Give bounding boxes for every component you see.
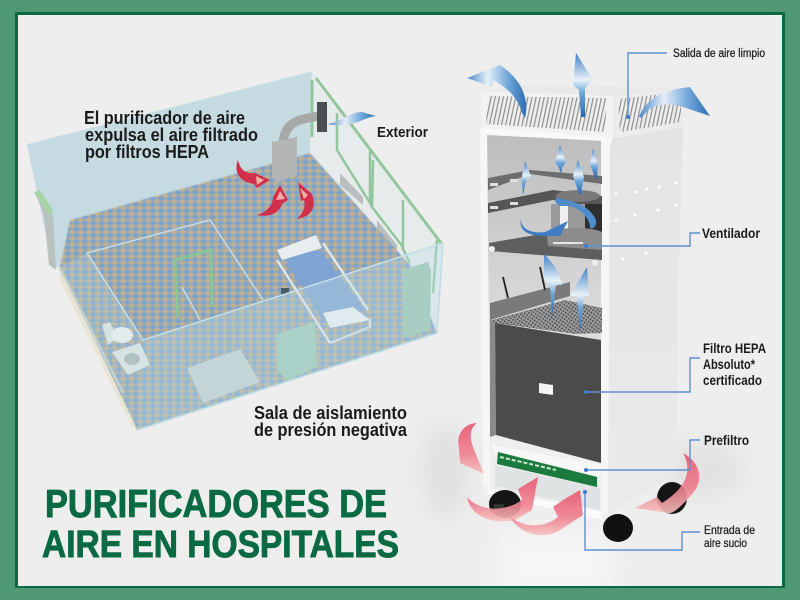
left post	[480, 128, 490, 488]
callout: HEPA filter: Absoluto*	[703, 357, 756, 372]
intake opening	[495, 465, 600, 510]
air purifier cutaway	[458, 53, 710, 542]
right post	[601, 138, 610, 514]
cabinet: centre	[276, 322, 317, 381]
floor shadow	[426, 430, 736, 572]
callout: prefilter: Prefiltro	[704, 432, 749, 448]
inner glass partitions	[87, 220, 263, 320]
bottom frame	[487, 488, 603, 520]
lower rail and handles	[490, 267, 570, 320]
title: AIRE EN HOSPITALES	[42, 524, 399, 566]
checkered floor	[60, 153, 437, 430]
fan	[489, 190, 602, 266]
air purifier unit	[272, 102, 327, 182]
cabinet: right	[402, 262, 431, 338]
callout: HEPA filter	[584, 341, 766, 394]
prefilter band	[492, 445, 600, 487]
upper shelves	[488, 170, 602, 213]
callout: dirty air inlet	[583, 490, 755, 550]
side panel	[607, 127, 683, 514]
room caption: negative pressure: Sala de aislamiento	[254, 403, 407, 423]
callout: clean air outlet: Salida de aire limpio	[673, 48, 765, 60]
callout: dirty air inlet: aire sucio	[704, 536, 747, 550]
exterior blue arrow	[328, 112, 376, 125]
room caption: purifier: El purificador de aire	[84, 108, 245, 128]
HEPA filter	[490, 318, 601, 463]
floor mat	[187, 349, 260, 403]
label: exterior: Exterior	[377, 125, 428, 141]
wheels	[489, 482, 687, 542]
callout: HEPA filter: Filtro HEPA	[703, 341, 766, 356]
door frame	[175, 250, 212, 317]
callout: HEPA filter: certificado	[703, 373, 762, 388]
hospital bed	[277, 235, 370, 343]
callout: dirty air inlet: Entrada de	[704, 523, 755, 537]
side rivets	[614, 182, 678, 260]
room caption: purifier: expulsa el aire filtrado	[85, 125, 258, 145]
room caption: negative pressure	[254, 403, 408, 440]
back wall	[27, 72, 312, 268]
right wall	[310, 72, 443, 333]
red air arrows	[236, 160, 314, 219]
callout: clean air outlet	[626, 48, 765, 119]
room caption: purifier	[84, 108, 258, 162]
title: PURIFICADORES DE	[45, 483, 387, 526]
callout: fan	[584, 225, 760, 248]
isolation room illustration	[27, 72, 443, 430]
top vent cap	[482, 85, 684, 146]
toilet	[102, 322, 150, 375]
callout: fan: Ventilador	[702, 225, 760, 241]
dirty air arrows	[458, 423, 699, 535]
left door	[34, 190, 134, 427]
glass walls	[27, 72, 443, 430]
room caption: purifier: por filtros HEPA	[85, 142, 209, 162]
clean air arrows: inside	[521, 145, 598, 236]
filter mesh	[492, 300, 602, 334]
title	[42, 483, 399, 566]
room caption: negative pressure: de presión negativa	[254, 420, 408, 440]
interior	[487, 135, 604, 470]
callout: prefilter	[584, 432, 749, 472]
clean air arrows: filter	[544, 254, 589, 333]
clean air arrows: top	[467, 53, 710, 118]
